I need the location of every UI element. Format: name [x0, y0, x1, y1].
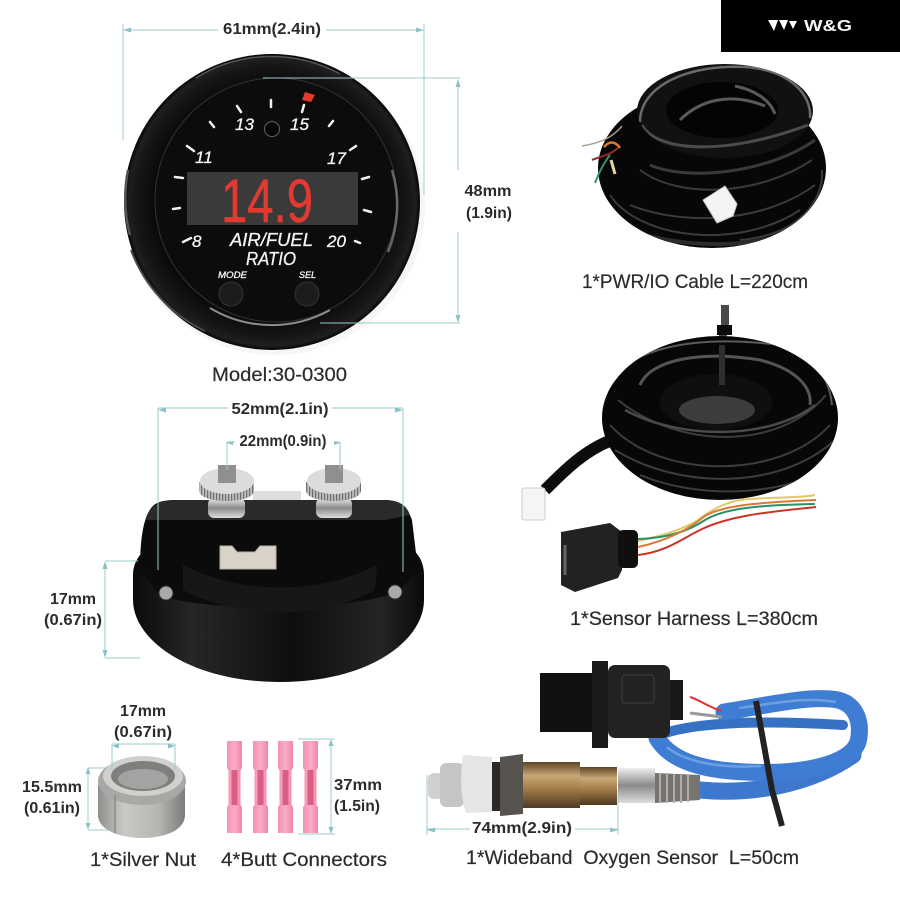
base screws: [159, 586, 173, 600]
gauge: RATIO: [246, 249, 296, 269]
butt connectors: [227, 741, 318, 833]
connectors caption: 4*Butt Connectors: [221, 850, 387, 871]
display panel: [187, 172, 358, 225]
gauge dimensions: [123, 21, 512, 323]
buttons: MODE: [218, 270, 248, 280]
mount dimensions: (0.67in): [44, 612, 102, 629]
cable wires: [582, 126, 622, 146]
wires: [638, 495, 815, 541]
mount dimensions: 17mm: [50, 591, 96, 608]
brand logo: W&G: [804, 18, 852, 35]
silver nut: [98, 756, 186, 838]
nut dimensions: (0.67in): [114, 724, 172, 741]
rear connector: [253, 491, 301, 500]
plug: [561, 523, 622, 592]
sensor caption: 1*Wideband Oxygen Sensor L=50cm: [466, 848, 799, 869]
sensor dimension: 74mm(2.9in): [472, 820, 572, 837]
cable tie: [756, 701, 782, 826]
harness tail: [545, 440, 612, 490]
camera sensor: [264, 122, 280, 136]
blue sleeve: [657, 699, 859, 791]
gauge dimensions: 61mm(2.4in): [223, 21, 321, 38]
oxygen sensor: [428, 661, 859, 826]
mounting base: [133, 465, 424, 682]
PWR/IO cable: [582, 64, 826, 248]
dial numbers: 8: [192, 232, 202, 251]
gauge: [124, 54, 425, 355]
white connector: [522, 488, 545, 520]
nut dimensions: 37mm: [334, 777, 382, 794]
gauge dimensions: (1.9in): [466, 205, 512, 222]
brand logo: [721, 0, 900, 52]
dial numbers: 11: [195, 148, 213, 167]
mount dimensions: 52mm(2.1in): [232, 401, 328, 418]
dial numbers: 15: [290, 115, 309, 134]
dial numbers: 13: [235, 115, 254, 134]
PWR/IO caption: 1*PWR/IO Cable L=220cm: [582, 272, 808, 293]
model caption: Model:30-0300: [212, 365, 347, 386]
nut dimensions: (0.61in): [24, 800, 80, 817]
harness caption: 1*Sensor Harness L=380cm: [570, 609, 818, 630]
wires: [690, 697, 722, 711]
dial numbers: 20: [326, 232, 346, 251]
sensor dimension: [427, 775, 618, 837]
nut dimensions: [22, 703, 382, 834]
range marker: [302, 92, 315, 102]
connector socket: [220, 546, 276, 569]
nut dimensions: (1.5in): [334, 798, 380, 815]
buttons: [218, 270, 319, 306]
dial numbers: [192, 115, 346, 251]
mount dimensions: [44, 401, 403, 658]
sensor plug: [540, 673, 595, 732]
cable tie: [719, 305, 729, 383]
white connector: [703, 186, 737, 223]
thumb screws: [199, 465, 361, 518]
sensor probe: [428, 773, 444, 799]
dial ticks: [173, 100, 371, 243]
nut dimensions: 17mm: [120, 703, 166, 720]
gauge dimensions: 48mm: [464, 183, 512, 200]
digital readout: 14.9: [221, 167, 313, 235]
gauge label: AIR/FUEL: [229, 230, 313, 250]
mount dimensions: 22mm(0.9in): [240, 433, 326, 450]
dial numbers: 17: [327, 149, 346, 168]
sensor harness: [522, 305, 838, 592]
nut dimensions: 15.5mm: [22, 779, 82, 796]
buttons: SEL: [299, 270, 316, 280]
nut caption: 1*Silver Nut: [90, 850, 197, 871]
